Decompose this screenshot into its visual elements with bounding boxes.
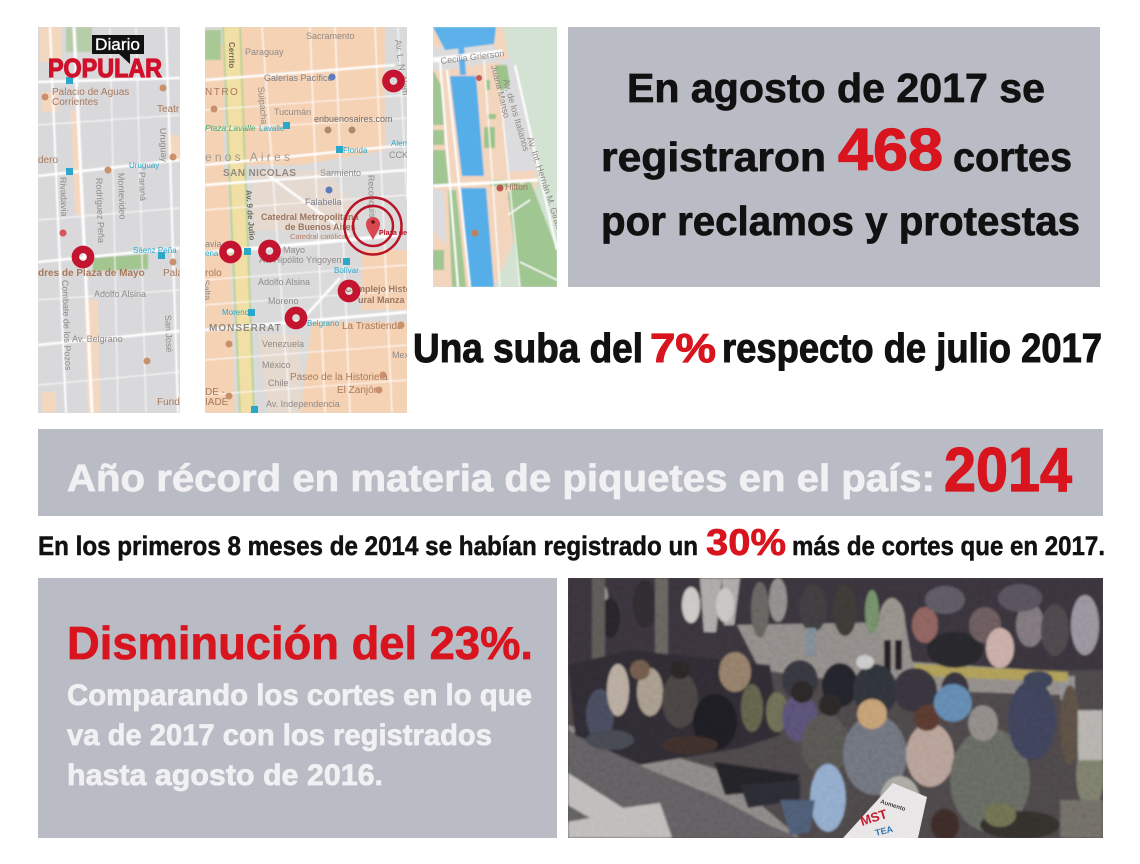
map: riverside map: Av. de los Italianos <box>501 78 531 153</box>
map: left street map: Montevideo <box>116 173 128 220</box>
logo: Diario Popular: POPULAR <box>48 53 162 83</box>
number: 468: 468 <box>838 117 943 183</box>
map: centre street map: México <box>262 360 291 370</box>
heading: Disminución del 23%. <box>67 617 533 669</box>
map: centre street map: Catedral católica <box>290 232 347 241</box>
map: centre street map: avia <box>205 239 222 249</box>
panel: 23% decrease <box>38 578 557 838</box>
statement: 7% rise: respecto de julio 2017 <box>722 325 1102 371</box>
map: left street map: Sáenz Peña <box>133 246 177 255</box>
map: centre street map: Mexic <box>392 350 416 360</box>
statement: 30% more in 2014: 30% <box>706 522 786 563</box>
map: centre street map: Moreno <box>222 308 250 317</box>
map: left street map: Funda <box>157 397 186 408</box>
marker: Alem protest point <box>386 73 401 89</box>
map: centre street map: Bolívar <box>334 266 359 275</box>
heading line 2: registraron <box>601 134 826 180</box>
statement: 7% rise: 7% <box>650 325 716 371</box>
map: left street map: Uruguay <box>129 161 159 170</box>
logo: Diario Popular: Diario <box>95 35 140 54</box>
map: centre street map: Adolfo Alsina <box>258 277 310 287</box>
map: centre street map: Sarmiento <box>320 168 361 178</box>
map: centre street map: Salta <box>201 279 213 301</box>
body text <box>67 679 532 792</box>
map: left street map: Rodríguez Peña <box>94 178 106 243</box>
map: centre street map: CCK <box>389 150 408 160</box>
body text: va de 2017 con los registrados <box>67 719 492 752</box>
map: centre street map: de Buenos Aires <box>285 222 356 232</box>
statement: 30% more in 2014: más de cortes que en 2017. <box>792 531 1105 561</box>
map: left street map: Palacio de Aguas <box>52 87 129 98</box>
map: riverside map <box>433 27 564 287</box>
map: centre street map: Sacramento <box>306 31 355 41</box>
plants <box>741 684 763 732</box>
map: centre street map: Venezuela <box>262 339 304 349</box>
map: left street map: Pala <box>163 268 183 279</box>
map: riverside map: Cecilia Grierson <box>440 48 505 66</box>
map: left street map: Combate de los Pozos <box>60 280 73 371</box>
heading line 2: cortes <box>953 134 1072 180</box>
seated row right <box>782 694 818 742</box>
map: centre street map: Cerrito <box>227 42 236 68</box>
map: left street map: Uruguay <box>158 128 169 163</box>
map: centre street map: Florida <box>343 146 368 155</box>
map: centre street map: Av. L. N. Alem <box>393 39 411 96</box>
map: centre street map: rolo <box>205 268 222 279</box>
middle row <box>782 660 818 700</box>
number: 2014: 2014 <box>944 436 1072 505</box>
placard <box>843 783 927 838</box>
seated crowd behind on kerb <box>912 607 938 643</box>
icon: target pin at Plaza de Mayo: Plaza de <box>379 230 407 237</box>
heading line 2 <box>601 117 1072 183</box>
placard: MST <box>858 806 889 829</box>
statement: 7% rise <box>413 325 1102 371</box>
map: centre street map: enos Aires <box>205 150 293 164</box>
statement: 7% rise: Una suba del <box>413 325 643 371</box>
map: centre street map: La Trastienda <box>342 321 403 332</box>
map: left street map: dero <box>38 155 58 166</box>
map: centre street map: Falabella <box>305 197 342 207</box>
map: centre street map: Av. Hipólito Yrigoyen <box>259 255 342 265</box>
seated row left <box>568 650 780 765</box>
map: left street map: Paraná <box>137 172 148 201</box>
placard: Aumento <box>879 799 906 813</box>
photo: seated protesters blocking a street <box>568 578 1103 838</box>
map: centre street map: Av. 9 de Julio <box>244 190 257 241</box>
map: centre street map: Tucumán <box>274 107 311 117</box>
map: riverside map: Hilton <box>505 182 528 192</box>
map: centre street map: Alem <box>391 139 410 148</box>
map: centre street map: enbuenosaires.com <box>314 114 393 124</box>
map: centre street map: MONSERRAT <box>209 323 282 334</box>
standing crowd <box>700 578 740 632</box>
marker: left map protest point <box>75 249 91 265</box>
map: centre street map <box>201 27 416 413</box>
map: centre street map: Reconquista <box>366 175 378 225</box>
map: left street map: Av. Belgrano <box>72 334 123 344</box>
map: centre street map: IADE <box>205 397 229 408</box>
logo: Diario Popular <box>48 35 162 83</box>
marker: Manzana de las Luces protest point <box>341 283 357 299</box>
banner: record year 2014 <box>38 429 1103 516</box>
map: centre street map: Catedral Metropolitana <box>261 212 360 222</box>
marker: Avenida de Mayo protest point <box>262 243 277 259</box>
map: centre street map: Galerías Pacífico <box>264 73 333 83</box>
map: left street map: dres de Plaza de Mayo <box>38 268 145 279</box>
placard: TEA <box>874 824 894 838</box>
map: centre street map: El Zanjón <box>337 385 379 396</box>
map: left street map: San José <box>163 315 174 353</box>
banner: record year 2014: Año récord en materia de piquetes en el país: <box>67 458 935 500</box>
body text: hasta agosto de 2016. <box>67 759 383 792</box>
map: centre street map: Belgrano <box>307 319 340 328</box>
map: centre street map: DE - <box>205 387 225 398</box>
icon: target pin at Plaza de Mayo <box>344 198 407 254</box>
marker: Diagonal Norte west protest point <box>223 244 238 260</box>
heading line 1: En agosto de 2017 se <box>627 65 1045 111</box>
map: centre street map: Chile <box>268 378 289 388</box>
map: centre street map: Lavalle <box>259 124 285 133</box>
map: centre street map: Plaza Lavalle <box>205 123 256 133</box>
map: centre street map: Mayo <box>283 245 305 255</box>
map: centre street map: ural Manza <box>358 295 406 305</box>
map: centre street map: NTRO <box>205 87 239 98</box>
map: left street map: Adolfo Alsina <box>94 289 146 299</box>
map: centre street map: Paseo de la Historieta <box>290 372 388 383</box>
map: riverside map: Juana Manso <box>489 64 512 119</box>
map: left street map: Rivadavia <box>58 177 69 217</box>
map: centre street map: Paraguay <box>245 47 284 57</box>
map: left street map: Corrientes <box>52 97 98 108</box>
map: centre street map: SAN NICOLAS <box>223 168 296 179</box>
map: centre street map: Complejo Histó <box>345 284 412 294</box>
body text: Comparando los cortes en lo que <box>67 679 532 712</box>
map: riverside map: Av. Int. Hernán M. Giralt <box>525 136 564 230</box>
panel: 468 cortes headline <box>568 27 1100 287</box>
map: centre street map: Av. Independencia <box>266 399 340 409</box>
map: left street map: Teatr <box>157 104 180 115</box>
map: centre street map: ena <box>205 249 219 258</box>
statement: 30% more in 2014 <box>38 522 1105 563</box>
marker: Belgrano protest point <box>288 310 304 326</box>
map: left street map <box>38 27 186 413</box>
heading line 3: por reclamos y protestas <box>601 198 1080 244</box>
statement: 30% more in 2014: En los primeros 8 meses de 2014 se habían registrado un <box>38 531 698 561</box>
map: centre street map: Suipacha <box>256 86 269 125</box>
map: centre street map: Moreno <box>268 296 299 306</box>
